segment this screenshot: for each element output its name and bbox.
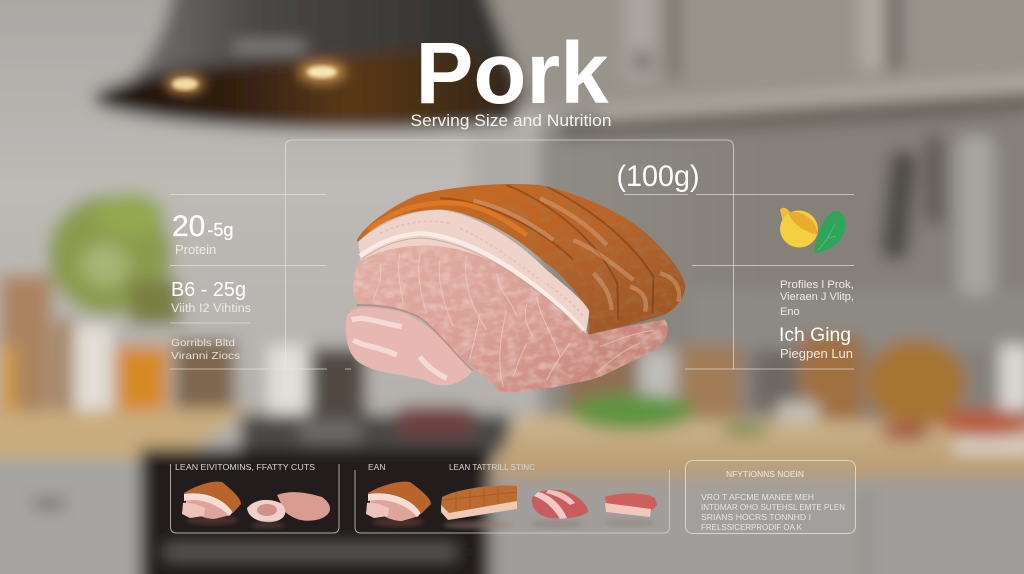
lean marbling — [373, 253, 570, 387]
range hood light band — [92, 48, 520, 130]
notes body: INTDMAR OHO SUTEHSL EMTE PLEN — [701, 503, 845, 512]
benefits text: Profiles l Prok, — [780, 279, 854, 291]
notes body: SRIANS HOCRS TONNHD I — [701, 513, 811, 522]
minerals label line two: Viranni Ziocs — [171, 350, 240, 362]
thumb: roast with skin — [182, 482, 241, 525]
box frame — [170, 464, 339, 533]
jars — [0, 275, 52, 415]
notes frame — [686, 460, 856, 534]
notes body — [701, 493, 845, 532]
highlight note: Piegpen Lun — [780, 347, 853, 361]
vitamin amount: B6 - 25g — [171, 279, 246, 301]
fat layer — [358, 210, 589, 333]
right objects — [565, 345, 635, 417]
thumb: roast — [366, 482, 431, 527]
subtitle: Serving Size and Nutrition — [410, 112, 612, 130]
notes body: FRELSSICERPRODIF OA K — [701, 523, 803, 532]
left stats panel — [171, 210, 251, 362]
thumb: raw chop — [605, 493, 657, 527]
lower left lobe — [346, 307, 473, 385]
thumb: raw loin — [531, 490, 588, 528]
plant — [48, 195, 172, 315]
serving size label: (100g) — [616, 160, 700, 193]
cut box two — [355, 462, 670, 533]
highlight: Ich Ging — [779, 325, 851, 346]
icon: lemon and leaf — [775, 205, 846, 253]
notes box — [686, 460, 856, 534]
lean meat — [353, 236, 593, 392]
notes body: VRO T AFCME MANEE MEH — [701, 493, 814, 502]
benefits text line two: Vieraen J Vlitp, — [780, 291, 854, 303]
skin score marks — [440, 185, 653, 320]
vitamin label: Viith I2 Vihtins — [171, 303, 251, 315]
lower right lobe — [540, 319, 668, 390]
thumb: marbled and lean cuts — [247, 492, 330, 528]
oven — [140, 448, 490, 574]
label lean fat: LEAN TATTRILL STINC — [449, 462, 535, 472]
left counter — [0, 408, 250, 460]
protein label: Protein — [175, 242, 216, 257]
benefits text line three: Eno — [780, 306, 800, 318]
cut box one — [170, 462, 339, 533]
right text panel — [779, 279, 854, 361]
hood lamps — [165, 74, 205, 94]
lobe seam — [357, 305, 473, 371]
minerals label: Gorribls Bltd — [171, 338, 235, 349]
box frame — [355, 470, 670, 533]
right counter — [488, 415, 1024, 488]
thumb: skin-on belly — [441, 485, 517, 529]
main pork roast image — [346, 184, 685, 392]
roasted skin — [357, 184, 685, 335]
range hood dome — [120, 0, 525, 100]
stovetop — [240, 414, 510, 454]
box label: LEAN EIVITOMINS, FFATTY CUTS — [175, 462, 315, 472]
central frame with guide lines — [170, 140, 854, 369]
label lean: EAN — [368, 462, 385, 472]
heading: Pork: Pork — [416, 25, 609, 122]
notes title: NFYTIONNS NOEIN — [726, 470, 804, 479]
protein amount: 20-5g — [172, 210, 233, 243]
